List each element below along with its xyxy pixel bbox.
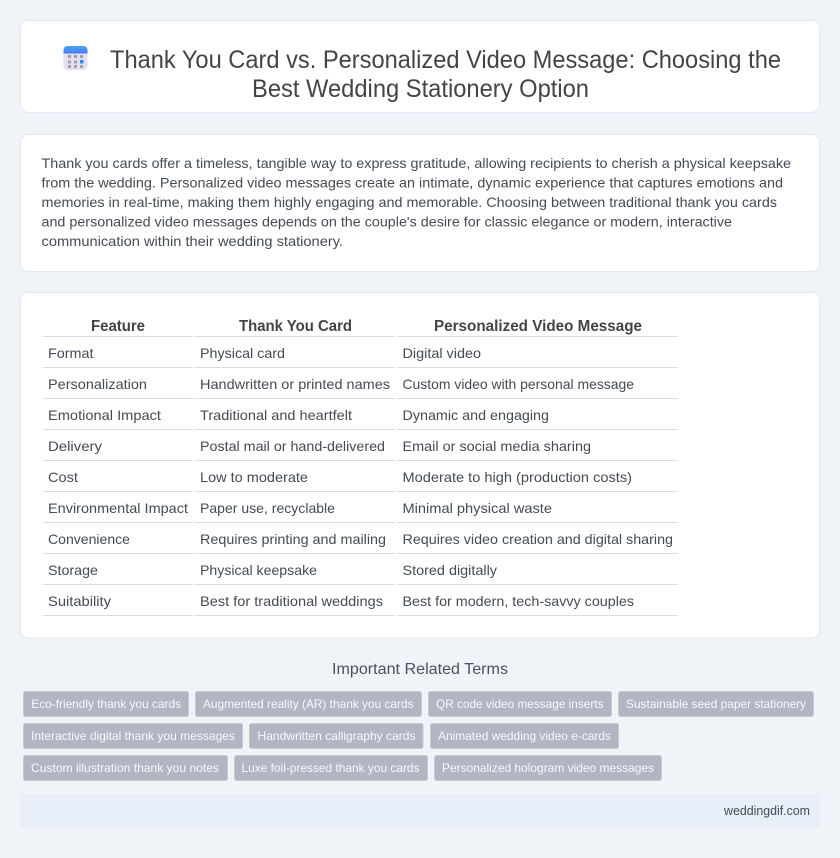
tag (24, 756, 228, 780)
row: emotional impact: Emotional Impact (48, 407, 161, 423)
intro paragraph: Thank you cards offer a timeless, tangible way to express gratitude, allowing recipients to cherish a physical keepsake (42, 155, 791, 171)
row: personalization: Handwritten or printed names (200, 376, 390, 392)
row: cost: Cost (48, 469, 78, 485)
row: suitability: Best for modern, tech-savvy couples (402, 593, 634, 609)
title: Best Wedding Stationery Option (252, 75, 589, 103)
tag: Custom illustration thank you notes (31, 761, 219, 775)
row: environmental impact: Paper use, recyclable (200, 500, 335, 516)
tag (618, 692, 814, 716)
intro paragraph (42, 155, 791, 249)
row: convenience: Requires printing and mailing (200, 531, 386, 547)
row: convenience (48, 531, 673, 547)
row: cost: Moderate to high (production costs) (402, 469, 632, 485)
row: emotional impact: Dynamic and engaging (402, 407, 549, 423)
intro paragraph: from the wedding. Personalized video messages create an intimate, dynamic experience that captures emotions and (42, 174, 783, 190)
tag: Eco-friendly thank you cards (31, 697, 181, 711)
tag (434, 756, 662, 780)
row: format (48, 345, 481, 361)
row: convenience: Requires video creation and digital sharing (402, 531, 673, 547)
row: delivery (48, 438, 591, 454)
row: format: Format (48, 345, 94, 361)
row: format: Digital video (402, 345, 481, 361)
footer (20, 794, 820, 828)
panel: header (20, 20, 820, 112)
table header (91, 318, 642, 335)
tag (196, 692, 422, 716)
row: environmental impact: Minimal physical waste (402, 500, 552, 516)
table header: Thank You Card (239, 318, 352, 335)
row: delivery: Email or social media sharing (402, 438, 591, 454)
row: suitability (48, 593, 634, 609)
row: format: Physical card (200, 345, 285, 361)
panel: introduction (20, 134, 820, 272)
row: personalization (48, 376, 634, 392)
row: storage: Stored digitally (402, 562, 497, 578)
tag (24, 724, 242, 748)
tag (250, 724, 423, 748)
intro paragraph: communication within their wedding stationery. (42, 233, 343, 249)
row: storage (48, 562, 497, 578)
tag (24, 692, 188, 716)
tag: Handwritten calligraphy cards (258, 729, 416, 743)
tag: Luxe foil-pressed thank you cards (242, 761, 420, 775)
row: convenience: Convenience (48, 531, 130, 547)
row: storage: Physical keepsake (200, 562, 317, 578)
title: Thank You Card vs. Personalized Video Message: Choosing the (110, 46, 781, 74)
row: suitability: Best for traditional weddings (200, 593, 383, 609)
title (110, 46, 781, 103)
tag (428, 692, 612, 716)
tag: Augmented reality (AR) thank you cards (203, 697, 414, 711)
row: environmental impact: Environmental Impact (48, 500, 188, 516)
tag: QR code video message inserts (436, 697, 604, 711)
panel: comparison table (20, 292, 820, 638)
row: emotional impact (48, 407, 549, 423)
tag: Interactive digital thank you messages (31, 729, 235, 743)
row: storage: Storage (48, 562, 98, 578)
heading: important related terms: Important Related Terms (332, 661, 508, 678)
row: delivery: Postal mail or hand-delivered (200, 438, 385, 454)
tag (430, 724, 618, 748)
tag (234, 756, 428, 780)
row: delivery: Delivery (48, 438, 102, 454)
table header: Personalized Video Message (434, 318, 642, 335)
tag: Animated wedding video e-cards (438, 729, 611, 743)
row: cost: Low to moderate (200, 469, 308, 485)
tag: Personalized hologram video messages (442, 761, 654, 775)
related term tags (24, 692, 814, 780)
row: cost (48, 469, 632, 485)
icon: calendar (64, 46, 88, 70)
row: emotional impact: Traditional and heartfelt (200, 407, 352, 423)
tag: Sustainable seed paper stationery (626, 697, 806, 711)
intro paragraph: memories in real-time, making them highly engaging and memorable. Choosing between traditional thank you cards (42, 194, 777, 210)
table header: Feature (91, 318, 145, 335)
intro paragraph: and personalized video messages depends on the couple's desire for classic elegance or modern, interactive (42, 214, 732, 230)
row: environmental impact (48, 500, 552, 516)
footer source text: weddingdif.com (723, 804, 810, 818)
row: personalization: Custom video with personal message (402, 376, 634, 392)
row: personalization: Personalization (48, 376, 147, 392)
row: suitability: Suitability (48, 593, 111, 609)
